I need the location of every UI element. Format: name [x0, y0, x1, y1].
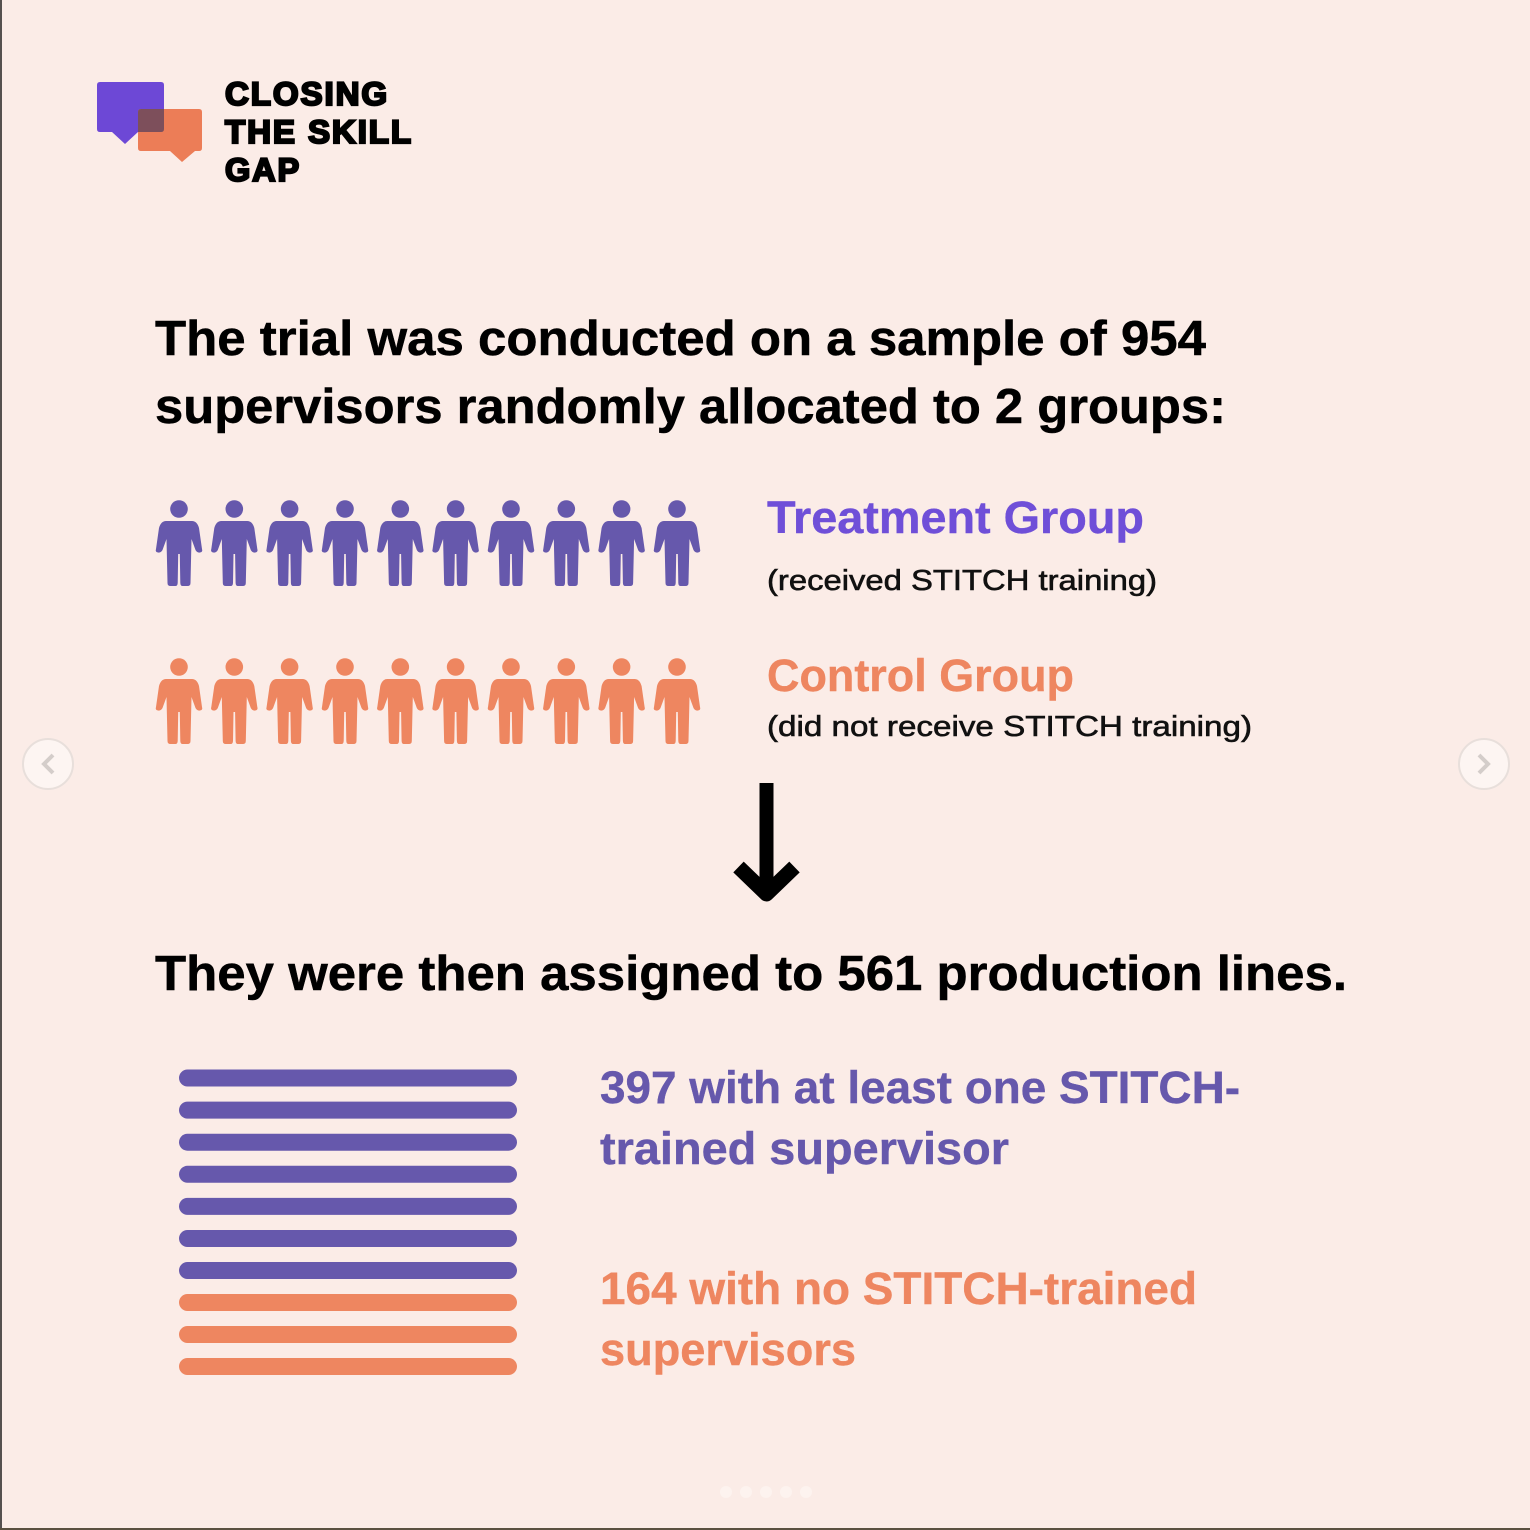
- heading: trial sample: supervisors randomly allocated to 2 groups:: [155, 380, 1226, 434]
- label: treatment group: (received STITCH training): [767, 565, 1157, 597]
- text: lines with no trained supervisor: supervisors: [600, 1324, 856, 1375]
- logo title: [225, 76, 413, 188]
- heading: production lines: They were then assigned to 561 production lines.: [155, 947, 1347, 1001]
- text: lines with no trained supervisor: 164 with no STITCH-trained: [600, 1263, 1197, 1314]
- pagination dots: [720, 1486, 812, 1498]
- logo title: GAP: [225, 152, 301, 188]
- arrow: down: [738, 783, 794, 894]
- icon row: treatment group people: [156, 500, 700, 586]
- label: treatment group: Treatment Group: [767, 492, 1144, 543]
- text: lines with trained supervisor: trained supervisor: [600, 1123, 1009, 1174]
- icon: next button: [1459, 739, 1509, 789]
- label: control group: (did not receive STITCH training): [767, 711, 1252, 743]
- logo title: THE SKILL: [225, 114, 413, 150]
- chart: production line bars: [179, 1070, 517, 1375]
- text: lines with trained supervisor: [600, 1062, 1240, 1174]
- icon row: control group people: [156, 658, 700, 744]
- label: control group: [767, 650, 1252, 743]
- label: control group: Control Group: [767, 650, 1074, 701]
- text: lines with trained supervisor: 397 with at least one STITCH-: [600, 1062, 1240, 1113]
- label: treatment group: [767, 492, 1157, 597]
- logo title: CLOSING: [225, 76, 389, 112]
- logo: [97, 76, 413, 188]
- icon: previous button: [23, 739, 73, 789]
- text: lines with no trained supervisor: [600, 1263, 1197, 1375]
- icon: speech bubbles: [97, 82, 202, 162]
- heading: trial sample: [155, 312, 1226, 434]
- heading: trial sample: The trial was conducted on a sample of 954: [155, 312, 1206, 366]
